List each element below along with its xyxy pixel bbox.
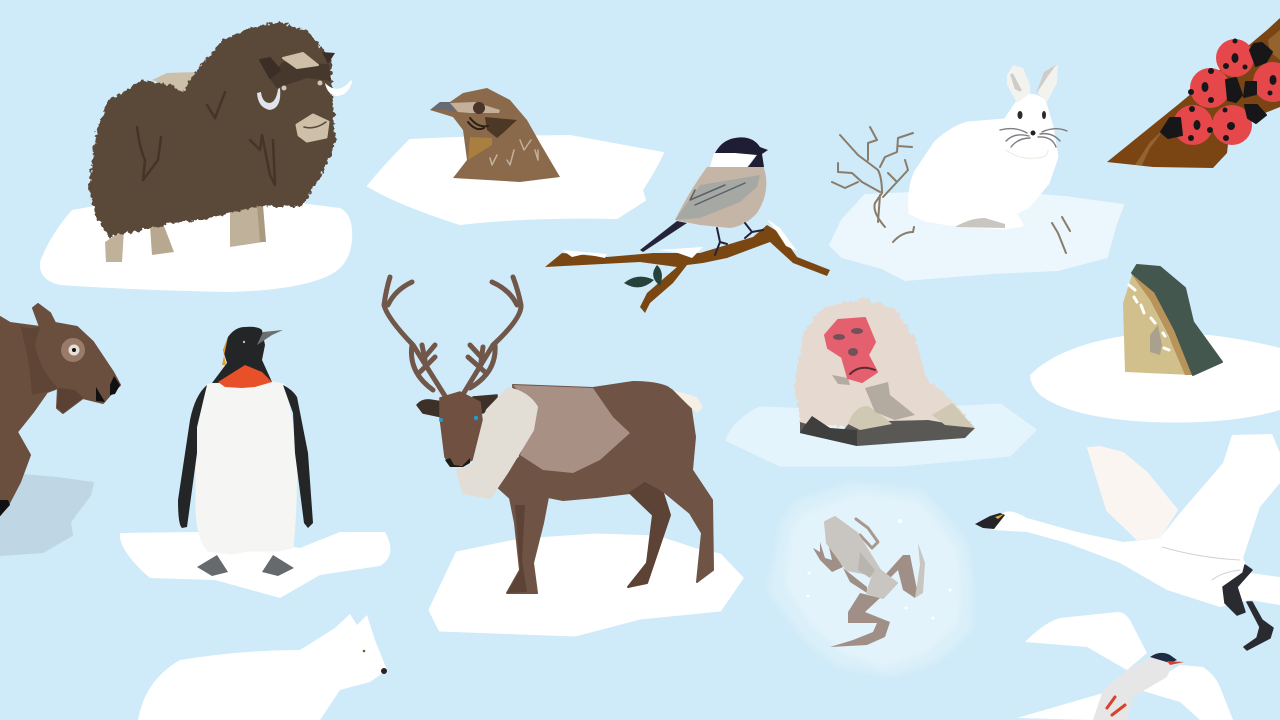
- hare on ice: [830, 65, 1123, 280]
- macaque on ice: [727, 300, 1035, 465]
- lichen rock on ice: [1030, 265, 1280, 422]
- grouse on ice: [368, 88, 663, 224]
- penguin on ice: [120, 327, 390, 598]
- moose: [0, 304, 120, 555]
- reindeer on ice: [384, 277, 742, 635]
- arctic fox: [138, 614, 387, 720]
- arctic tern: [1017, 612, 1233, 720]
- ladybirds on bark: [1107, 18, 1280, 168]
- swan: [975, 434, 1280, 650]
- chickadee on branch: [545, 137, 830, 313]
- frog in ice: [767, 482, 973, 677]
- musk ox on ice: [40, 24, 352, 292]
